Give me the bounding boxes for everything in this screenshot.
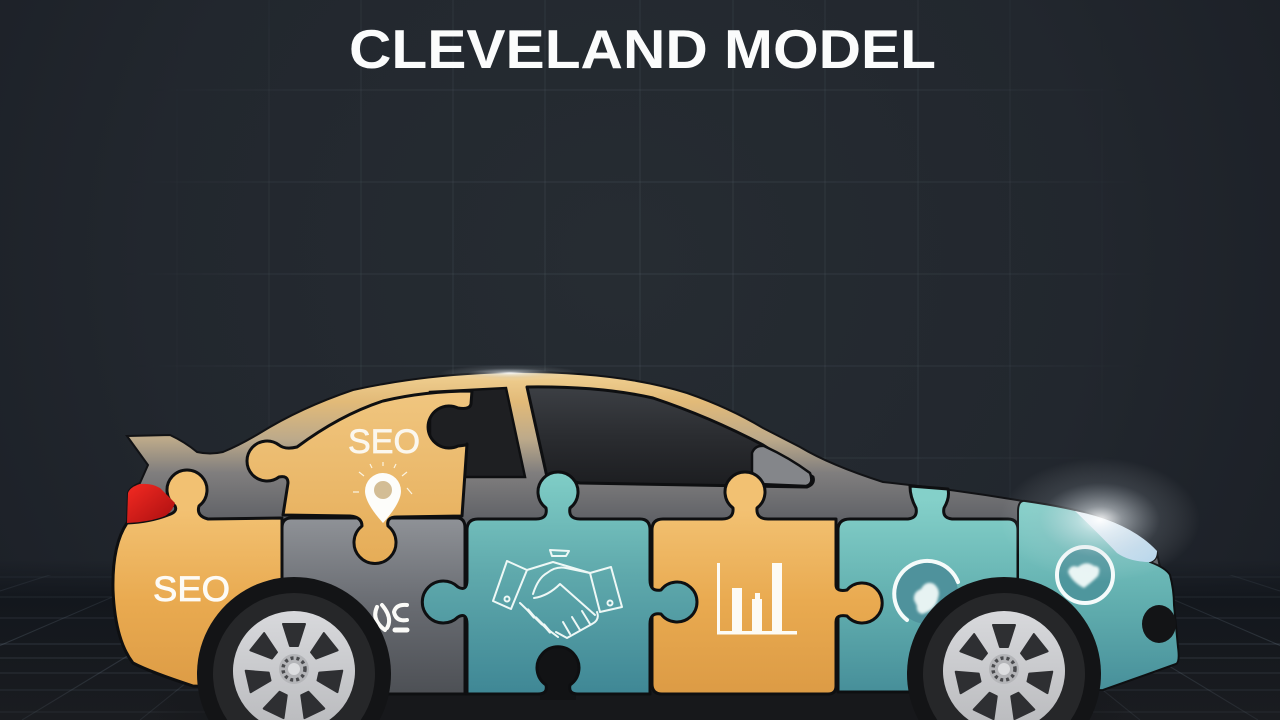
rear wheel [197,577,391,720]
icon: heart badge [1057,547,1113,603]
SEO label upper: SEO [348,423,420,461]
car body base [113,372,1178,690]
SEO label lower: SEO [153,570,230,609]
side mirror [752,446,811,486]
puzzle piece: centre orange with bar chart [652,472,882,694]
puzzle piece: centre teal with handshake [422,472,697,694]
icon: location pin [353,462,412,523]
icon: handshake [493,550,622,638]
puzzle piece: rear orange with SEO [113,470,282,690]
ground shadow [150,692,1130,720]
front wheel [907,577,1101,720]
puzzle piece: upper orange with SEO and pin [247,391,472,563]
title: CLEVELAND MODEL [349,18,936,80]
tail light [127,484,175,523]
bumper socket [1142,605,1176,643]
headlight glow [1000,458,1200,582]
puzzle piece: right teal with gauge icon [838,486,1018,692]
bar chart icon [717,563,797,634]
headlight [1075,511,1157,562]
icon: gauge [894,561,958,624]
puzzle piece: lower grey [282,518,465,694]
bottom socket hole [538,648,578,700]
car [113,372,1179,720]
floor [0,576,1280,720]
puzzle piece: front teal [1018,501,1179,692]
partial icon [375,605,407,630]
front window [527,387,813,487]
roof highlight [440,365,580,381]
rear window [430,388,525,477]
background grid [244,0,1036,485]
